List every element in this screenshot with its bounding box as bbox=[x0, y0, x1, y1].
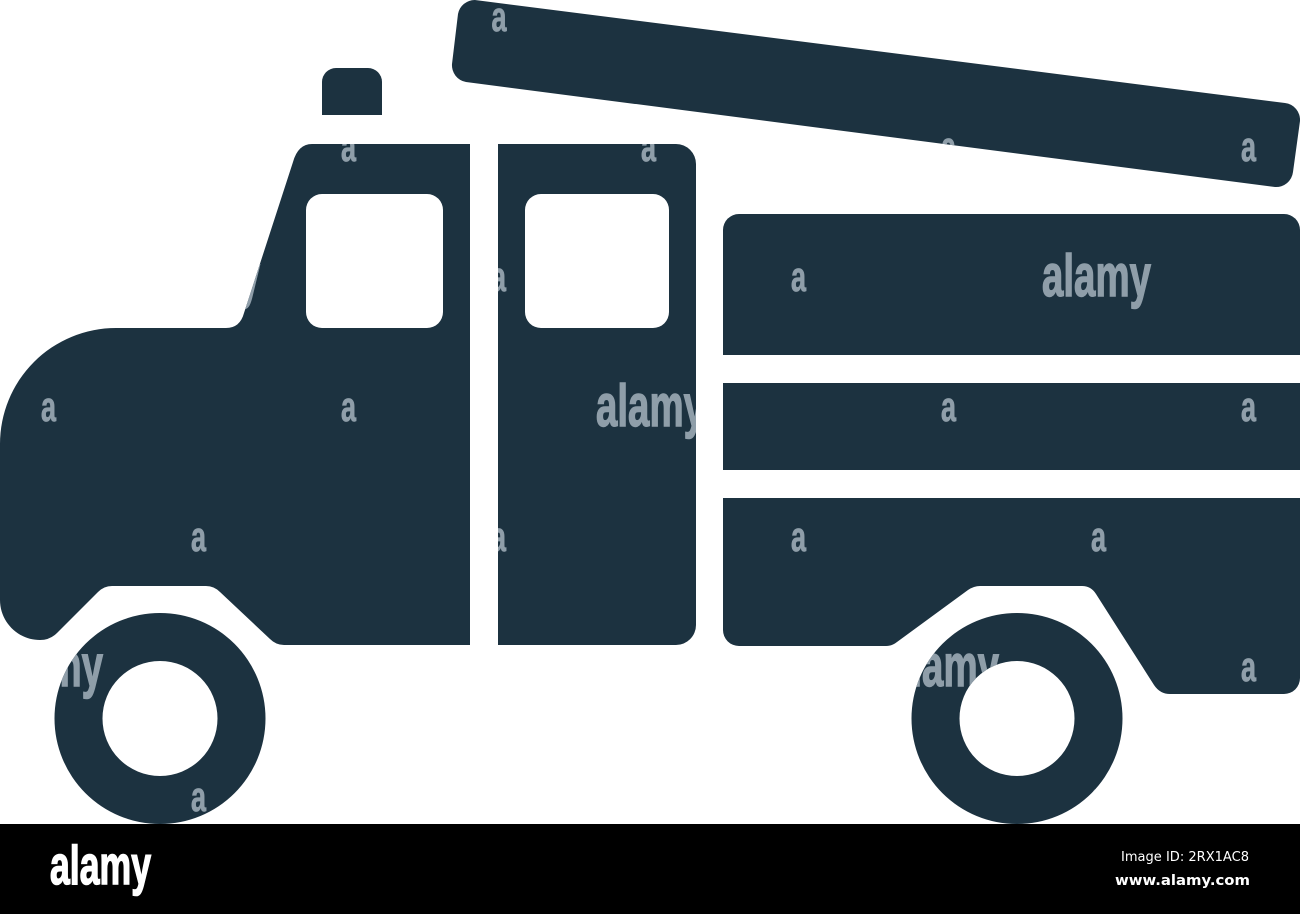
watermarks: a bbox=[1091, 513, 1106, 560]
watermarks: a bbox=[341, 123, 356, 170]
watermarks: alamy bbox=[151, 243, 260, 309]
footer logo: alamy bbox=[50, 834, 151, 896]
watermarks: a bbox=[41, 383, 56, 430]
body middle panel bbox=[723, 383, 1300, 470]
siren bbox=[322, 68, 382, 115]
watermarks: a bbox=[1241, 123, 1256, 170]
watermarks: a bbox=[1241, 383, 1256, 430]
footer bar bbox=[0, 824, 1300, 914]
watermarks: a bbox=[491, 513, 506, 560]
watermarks: a bbox=[791, 253, 806, 300]
watermarks: a bbox=[491, 253, 506, 300]
image id: Image ID: 2RX1AC8 bbox=[1121, 850, 1249, 865]
watermarks: a bbox=[941, 123, 956, 170]
ladder bbox=[452, 0, 1300, 187]
watermarks: a bbox=[1091, 773, 1106, 820]
watermarks: a bbox=[791, 513, 806, 560]
body top panel bbox=[723, 214, 1300, 355]
watermarks: a bbox=[191, 513, 206, 560]
watermarks: a bbox=[191, 773, 206, 820]
website: www.alamy.com bbox=[1115, 872, 1250, 889]
watermarks: a bbox=[1241, 643, 1256, 690]
watermarks: alamy bbox=[596, 373, 705, 439]
watermarks: alamy bbox=[890, 633, 999, 699]
body lower panel bbox=[723, 498, 1300, 694]
cab rear door bbox=[498, 144, 696, 645]
watermarks: a bbox=[341, 383, 356, 430]
watermarks: a bbox=[641, 123, 656, 170]
watermarks: alamy bbox=[1042, 243, 1151, 309]
cab front bbox=[0, 144, 470, 645]
watermarks: a bbox=[941, 383, 956, 430]
rear wheel bbox=[912, 613, 1122, 824]
front wheel bbox=[55, 613, 266, 824]
